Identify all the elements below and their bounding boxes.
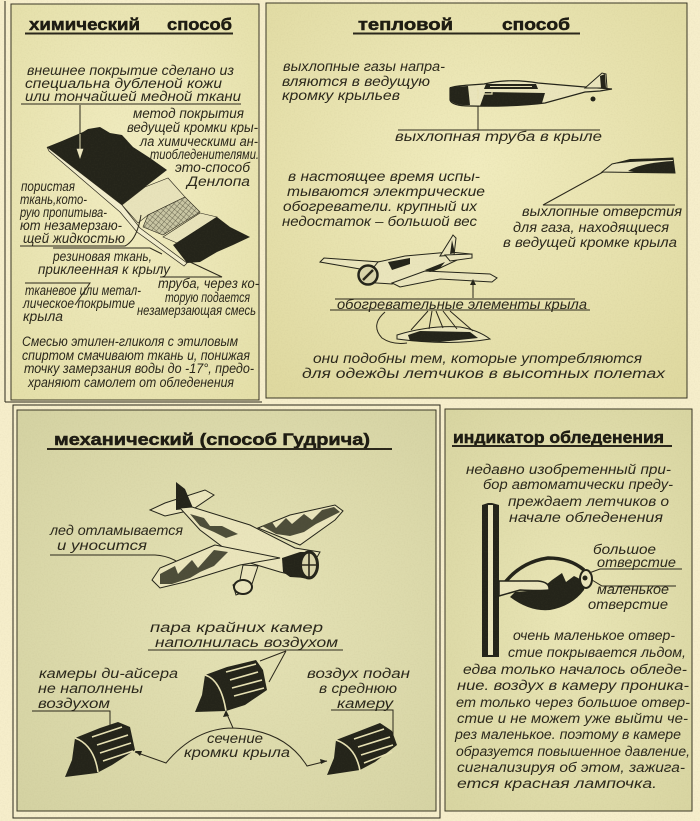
text: wing edge section label xyxy=(135,710,327,766)
icon: wing leading edge with layers xyxy=(47,127,250,266)
text: chemical mixture explanation: храняют самолет от обледенения xyxy=(27,375,234,390)
text: flight-suit comparison xyxy=(302,351,667,381)
text: feed tube: незамерзающая смесь xyxy=(137,303,256,318)
text: exhaust pipe label: выхлопная труба в крыле xyxy=(395,129,602,144)
text: electric heaters xyxy=(282,169,485,229)
text: air into middle chamber xyxy=(307,666,411,736)
text: outer covering: или тончайшей медной ткани xyxy=(25,89,242,104)
text: exhaust openings label: для газа, находящиеся xyxy=(513,220,669,235)
text: Dunlop method: ведущей кромки кры- xyxy=(127,120,258,135)
text: porous fabric: ткань,кото- xyxy=(20,192,87,207)
text: outer covering: специальна дубленой кожи xyxy=(25,76,223,91)
text: how the indicator works: ет только через большое отвер- xyxy=(456,695,691,710)
text: wing edge section label: сечение xyxy=(207,731,263,746)
text: device description: недавно изобретенный при- xyxy=(466,462,672,477)
text: exhaust openings label: в ведущей кромке крыла xyxy=(503,235,678,250)
text: how the indicator works: едва только началось обледе- xyxy=(463,662,688,677)
text: how the indicator works: ние. воздух в камеру проника- xyxy=(457,678,690,693)
text: air into middle chamber: воздух подан xyxy=(307,666,411,681)
text: wing skin xyxy=(22,283,141,324)
icon: indicator instrument xyxy=(482,503,592,657)
text: flight-suit comparison: они подобны тем, которые употребляются xyxy=(313,351,642,366)
text: heating elements label: обогревательные элементы крыла xyxy=(337,297,588,312)
icon: wing section with exhaust openings xyxy=(602,158,675,173)
text: electric heaters: тываются электрические xyxy=(287,184,485,199)
text: Dunlop method: тиобледенителями. xyxy=(150,147,259,162)
text: porous fabric: пористая xyxy=(21,179,75,194)
text: electric heaters: обогреватели. крупный их xyxy=(283,199,478,214)
text: how the indicator works: рез маленькое. поэтому в камере xyxy=(454,727,681,742)
text: ice breaks off: и уносится xyxy=(57,538,147,553)
text: exhaust gases: вляются в ведущую xyxy=(282,74,430,89)
text: outer chambers filled xyxy=(148,620,343,682)
panel: thermal method xyxy=(266,3,687,398)
text: exhaust gases: выхлопные газы напра- xyxy=(283,59,446,74)
text: outer chambers filled: наполнилась воздухом xyxy=(155,635,338,650)
text: how the indicator works: образуется повышенное давление, xyxy=(456,744,690,759)
text: small opening label: отверстие xyxy=(588,597,668,612)
text: how the indicator works: стие и не может уже выйти че- xyxy=(457,711,689,726)
text: large opening label: большое xyxy=(593,542,656,557)
text: outer covering xyxy=(21,63,242,104)
panel: icing indicator xyxy=(445,409,692,811)
text: Dunlop method xyxy=(127,106,259,189)
heading: thermal method: тепловой xyxy=(358,15,453,34)
text: Dunlop method: ла химическими ан- xyxy=(139,134,258,149)
text: feed tube: труба, через ко- xyxy=(158,276,259,291)
text: flight-suit comparison: для одежды летчиков в высотных полетах xyxy=(302,366,667,381)
text: how the indicator works: очень маленькое отвер- xyxy=(513,628,676,643)
text: air into middle chamber: в среднюю xyxy=(319,681,397,696)
text: porous fabric: ют незамерзаю- xyxy=(20,218,122,233)
heading: mechanical method: механический (способ Гудрича) xyxy=(54,430,370,449)
text: small opening label: маленькое xyxy=(597,582,669,597)
text: device description: бор автоматически преду- xyxy=(483,477,674,492)
text: how the indicator works xyxy=(454,628,691,791)
text: chemical mixture explanation: точку замерзания воды до -17°, предо- xyxy=(24,361,254,376)
text: porous fabric xyxy=(19,179,141,246)
icon: de-icer section, middle chamber filled xyxy=(327,723,397,775)
text: electric heaters: в настоящее время испы- xyxy=(288,169,481,184)
text: wing skin: тканевое или метал- xyxy=(25,283,141,298)
text: heating elements label xyxy=(330,279,590,312)
text: chambers not filled xyxy=(32,666,179,731)
text: large opening label: отверстие xyxy=(597,555,676,570)
text: chambers not filled: камеры ди-айсера xyxy=(39,666,179,681)
text: device description: начале обледенения xyxy=(509,510,663,525)
text: porous fabric: щей жидкостью xyxy=(23,231,125,246)
text: large opening label xyxy=(589,542,682,573)
text: wing skin: лическое покрытие xyxy=(22,296,135,311)
text: ice breaks off xyxy=(49,523,190,572)
text: how the indicator works: ется красная лампочка. xyxy=(457,776,657,791)
text: outer covering: внешнее покрытие сделано из xyxy=(27,63,234,78)
arrow: to outer covering xyxy=(77,105,83,158)
text: small opening label xyxy=(588,580,676,612)
text: exhaust gases: кромку крыльев xyxy=(282,88,400,103)
icon: de-icer section, chambers empty xyxy=(65,722,135,777)
icon: aeroplane with de-icer boots xyxy=(150,482,343,595)
icon: heated wing section xyxy=(377,311,490,343)
text: Dunlop method: Денлопа xyxy=(185,174,251,189)
text: ice breaks off: лед отламывается xyxy=(49,523,183,538)
text: porous fabric: рую пропитыва- xyxy=(19,205,107,220)
heading: chemical method: химический xyxy=(29,15,140,34)
text: Dunlop method: это-способ xyxy=(175,160,250,175)
text: Dunlop method: метод покрытия xyxy=(133,106,244,121)
text: exhaust openings label: выхлопные отверстия xyxy=(522,204,682,219)
text: wing edge section label: кромки крыла xyxy=(184,745,291,760)
text: chemical mixture explanation: спиртом смачивают ткань и, понижая xyxy=(22,348,250,363)
text: feed tube: торую подается xyxy=(165,290,250,305)
icon: side-view aeroplane xyxy=(450,73,612,106)
text: chambers not filled: не наполнены xyxy=(38,681,143,696)
text: chemical mixture explanation: Смесью этилен-гликоля с этиловым xyxy=(22,334,238,349)
text: exhaust openings label xyxy=(503,172,682,250)
heading: chemical method xyxy=(25,15,233,34)
heading: chemical method: способ xyxy=(167,15,232,34)
text: chemical mixture explanation xyxy=(22,334,254,390)
heading: icing indicator: индикатор обледенения xyxy=(453,428,664,447)
text: outer chambers filled: пара крайних камер xyxy=(150,620,324,635)
text: device description xyxy=(466,462,674,525)
heading: thermal method xyxy=(353,15,580,34)
panel: chemical method xyxy=(5,1,262,402)
text: air into middle chamber: камеру xyxy=(337,696,395,711)
icon: aeroplane with heated wings xyxy=(320,235,497,287)
heading: thermal method: способ xyxy=(502,15,570,34)
text: how the indicator works: сигнализируя об этом, зажига- xyxy=(457,760,686,775)
text: wing skin: крыла xyxy=(23,309,63,324)
text: electric heaters: недостаток – большой вес xyxy=(282,214,477,229)
text: exhaust gases xyxy=(282,59,446,103)
icon: de-icer section, outer chambers filled xyxy=(195,660,267,712)
text: device description: преждает летчиков о xyxy=(508,494,670,509)
text: rubber fabric: резиновая ткань, xyxy=(52,249,152,264)
text: how the indicator works: стие покрывается льдом, xyxy=(508,645,686,660)
text: rubber fabric: приклеенная к крылу xyxy=(38,262,171,277)
text: rubber fabric xyxy=(38,248,171,277)
panel: mechanical method xyxy=(13,405,440,818)
text: feed tube xyxy=(137,262,259,318)
text: exhaust pipe label xyxy=(395,106,602,144)
text: chambers not filled: воздухом xyxy=(38,696,110,711)
